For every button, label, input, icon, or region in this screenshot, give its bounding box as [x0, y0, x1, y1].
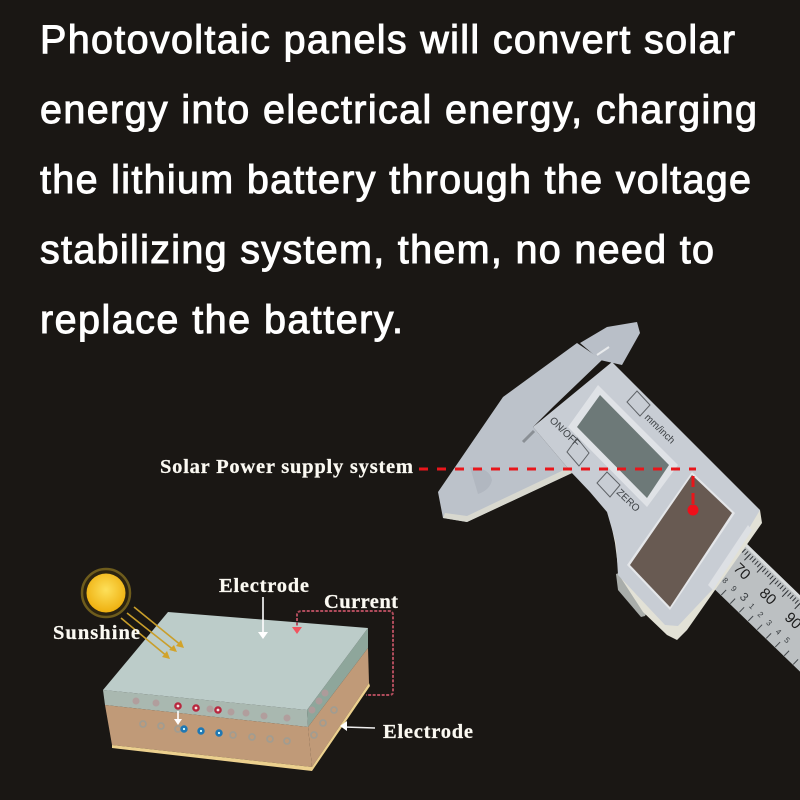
ruler: 9 — [729, 584, 739, 594]
arrows: sun rays — [121, 607, 184, 659]
current loop — [292, 611, 393, 695]
title: photovoltaic description: Photovoltaic panels will convert solar — [40, 18, 735, 62]
title: photovoltaic description: stabilizing system, them, no need to — [40, 228, 714, 272]
icon: sun — [82, 569, 130, 617]
ruler: 2 — [756, 610, 765, 620]
ruler: 5 — [782, 636, 792, 645]
title: photovoltaic description — [40, 18, 757, 342]
front faces — [103, 690, 308, 727]
label: mm/inch: mm/inch — [642, 412, 677, 446]
display bezel — [568, 385, 678, 507]
callout line: solar power supply — [419, 469, 698, 516]
ruler: 3 — [737, 590, 752, 605]
faded charges — [132, 690, 328, 722]
ruler: 8 — [720, 576, 730, 586]
ruler: 70 — [730, 560, 754, 584]
button: mm/inch — [627, 391, 650, 416]
title: photovoltaic description: energy into electrical energy, charging — [40, 88, 757, 132]
solar panel — [630, 475, 732, 607]
arrow: bottom electrode — [340, 721, 375, 731]
ruler: 3 — [764, 618, 774, 628]
title: photovoltaic description: replace the battery. — [40, 298, 403, 342]
button: zero — [597, 472, 620, 497]
caliper body — [533, 362, 760, 626]
ruler: 80 — [756, 585, 780, 609]
label: top electrode: Electrode — [219, 575, 309, 597]
blue charges — [182, 727, 221, 735]
label: on/off: ON/OFF — [547, 415, 582, 449]
arrow: top electrode — [258, 597, 268, 639]
label: current: Current — [324, 591, 398, 613]
label: zero: ZERO — [614, 487, 642, 515]
button: on/off — [567, 438, 589, 466]
ruler: 1 — [747, 601, 757, 611]
right side faces — [307, 628, 368, 727]
top electrode face — [103, 612, 368, 710]
grip teeth — [616, 572, 650, 617]
solar panel bezel — [627, 472, 735, 610]
ruler: 4 — [774, 627, 783, 637]
label: sunshine: Sunshine — [53, 622, 140, 644]
cream underside of body — [572, 473, 762, 640]
arrow: charge movement — [174, 711, 182, 725]
lower jaw — [438, 343, 602, 522]
upper jaw fin — [580, 322, 640, 365]
illustration: digital caliper — [438, 322, 800, 682]
ruler — [703, 538, 800, 682]
title: photovoltaic description: the lithium battery through the voltage — [40, 158, 751, 202]
LCD display — [577, 395, 669, 498]
diagram: solar cell — [53, 569, 473, 771]
red charges — [175, 703, 221, 713]
label: bottom electrode: Electrode — [383, 721, 473, 743]
label: solar power supply system: Solar Power supply system — [160, 456, 413, 478]
